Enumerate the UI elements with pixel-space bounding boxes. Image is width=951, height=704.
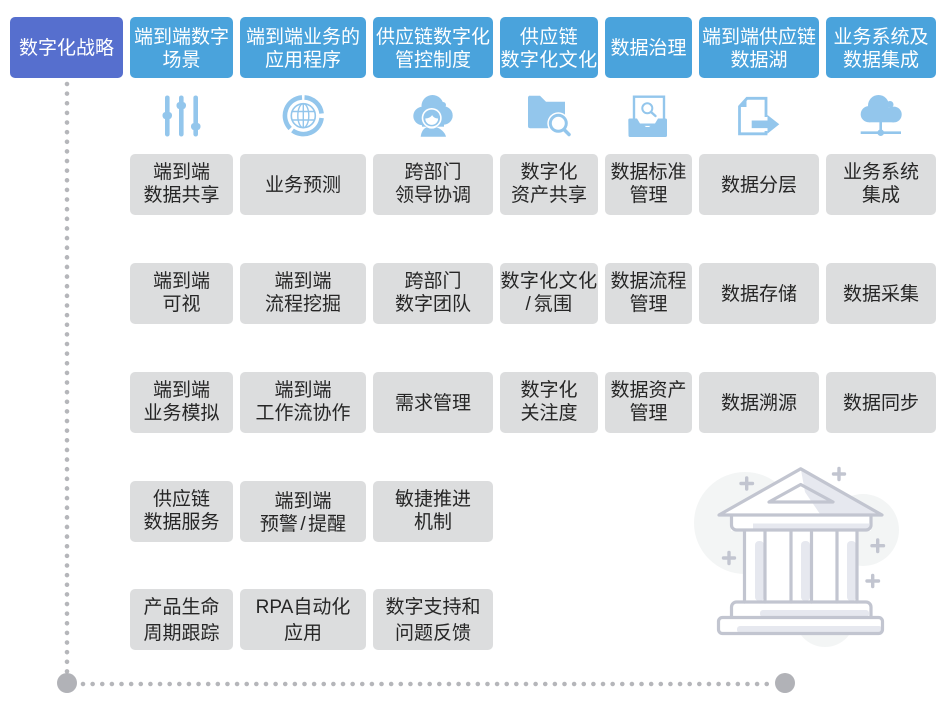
cell: 端到端预警/提醒: 端到端 [274,490,332,512]
cell: 敏捷推进机制 [373,481,493,542]
column header: business system integration: 业务系统及 [833,27,928,48]
cell: 数据资产管理: 数据资产 [610,380,686,400]
cell: RPA自动化应用: 应用 [284,622,322,644]
cell: 数据采集: 数据采集 [843,284,919,305]
cell: 数字化资产共享: 资产共享 [511,184,587,206]
cell: 端到端工作流协作: 工作流协作 [255,402,350,424]
cell: RPA自动化应用 [240,589,366,650]
column header: end-to-end digital scenarios: 场景 [162,50,200,71]
dotted horizontal axis [83,682,775,686]
cell: 数字化文化/氛围: 数字化文化 [500,270,598,292]
cell: 数据标准管理: 数据标准 [610,162,686,182]
cell: 端到端预警/提醒: 预警/提醒 [260,514,346,534]
column header: data governance [605,17,692,78]
cell: 跨部门数字团队: 跨部门 [404,270,462,292]
column header: supply chain digital culture: 供应链 [520,27,578,48]
cell: 端到端数据共享 [130,154,233,215]
cell: 数字化资产共享: 数字化 [520,162,578,182]
cell: 数据同步: 数据同步 [843,393,919,414]
axis origin node [57,673,77,693]
cell: 业务预测 [240,154,366,215]
cell: 端到端预警/提醒 [240,481,366,542]
cell: 端到端业务模拟: 端到端 [153,380,210,400]
cell: 供应链数据服务 [130,481,233,542]
cell: 跨部门领导协调: 领导协调 [395,184,471,206]
strategy heading: 数字化战略 [19,38,114,59]
cell: 业务系统集成: 集成 [862,184,900,206]
cell: 供应链数据服务: 数据服务 [143,512,220,532]
icon: folder search [528,96,569,134]
cell: 端到端数据共享: 数据共享 [143,184,220,206]
cell: 业务系统集成: 业务系统 [843,162,919,182]
cell: 需求管理 [373,372,493,433]
cell: RPA自动化应用: RPA自动化 [256,596,350,618]
icon: cloud network [861,95,902,136]
icon: document export [740,98,779,134]
cell: 数字化关注度: 关注度 [520,402,578,424]
cell: 数据溯源 [699,372,819,433]
cell: 数字化文化/氛围: /氛围 [525,294,572,314]
cell: 数据流程管理: 管理 [629,294,668,314]
cell: 数据资产管理: 管理 [629,402,668,424]
column header: supply chain governance: 管控制度 [395,50,471,71]
cell: 跨部门领导协调 [373,154,493,215]
cell: 数字化关注度: 数字化 [520,380,578,400]
column header: supply chain data lake: 端到端供应链 [702,27,816,48]
cell: 敏捷推进机制: 机制 [414,512,452,532]
icon: sliders [162,96,200,136]
cell: 产品生命周期跟踪 [130,589,233,650]
cell: 数字支持和问题反馈 [373,589,493,650]
column header: supply chain digital culture [500,17,598,78]
cell: 数字支持和问题反馈: 问题反馈 [395,622,471,644]
column header: business system integration [826,17,936,78]
cell: 业务系统集成 [826,154,936,215]
cell: 跨部门数字团队 [373,263,493,324]
cell: 端到端业务模拟: 业务模拟 [143,402,220,424]
cell: 端到端流程挖掘: 端到端 [274,270,332,292]
cell: 数字化文化/氛围 [500,263,598,324]
cell: 数字化资产共享 [500,154,598,215]
cell: 需求管理: 需求管理 [395,393,471,414]
cell: 数据采集 [826,263,936,324]
cell: 产品生命周期跟踪: 周期跟踪 [143,622,220,644]
dotted vertical axis [65,84,69,672]
cell: 业务预测: 业务预测 [265,175,341,196]
column header: supply chain governance [373,17,493,78]
axis end node [775,673,795,693]
cell: 数字支持和问题反馈: 数字支持和 [385,596,480,618]
cell: 端到端流程挖掘 [240,263,366,324]
strategy heading [10,17,123,78]
cell: 跨部门数字团队: 数字团队 [395,294,471,314]
cell: 端到端可视 [130,263,233,324]
icon: inbox search [628,97,667,137]
column header: data governance: 数据治理 [610,38,686,59]
cell: 端到端可视: 可视 [162,294,200,314]
column header: end-to-end digital scenarios [130,17,233,78]
cell: 数据流程管理 [605,263,692,324]
cell: 数据流程管理: 数据流程 [610,270,686,292]
cell: 数据同步 [826,372,936,433]
cell: 数据分层: 数据分层 [721,175,797,196]
column header: supply chain governance: 供应链数字化 [376,27,490,48]
cell: 产品生命周期跟踪: 产品生命 [143,596,220,618]
cell: 数据存储: 数据存储 [721,284,797,305]
cell: 端到端工作流协作 [240,372,366,433]
cell: 端到端数据共享: 端到端 [153,162,210,182]
cell: 敏捷推进机制: 敏捷推进 [395,488,471,510]
cell: 数据存储 [699,263,819,324]
illustration: classical building [694,468,899,647]
column header: end-to-end digital scenarios: 端到端数字 [134,27,229,48]
cell: 数据标准管理 [605,154,692,215]
column header: end-to-end business applications [240,17,366,78]
cell: 数据溯源: 数据溯源 [721,393,797,414]
cell: 跨部门领导协调: 跨部门 [404,162,462,182]
cell: 端到端流程挖掘: 流程挖掘 [265,294,341,314]
cell: 数字化关注度 [500,372,598,433]
cell: 数据分层 [699,154,819,215]
column header: business system integration: 数据集成 [843,50,919,71]
column header: supply chain data lake [699,17,819,78]
icon: globe [285,97,322,134]
cell: 数据标准管理: 管理 [629,184,668,206]
column header: supply chain data lake: 数据湖 [730,50,788,71]
column header: end-to-end business applications: 端到端业务的 [246,27,360,48]
icon: cloud person [413,95,453,137]
column header: end-to-end business applications: 应用程序 [265,50,341,71]
cell: 端到端可视: 端到端 [153,270,210,292]
cell: 供应链数据服务: 供应链 [153,488,210,510]
cell: 数据资产管理 [605,372,692,433]
cell: 端到端业务模拟 [130,372,233,433]
cell: 端到端工作流协作: 端到端 [274,380,332,400]
column header: supply chain digital culture: 数字化文化 [500,50,598,71]
